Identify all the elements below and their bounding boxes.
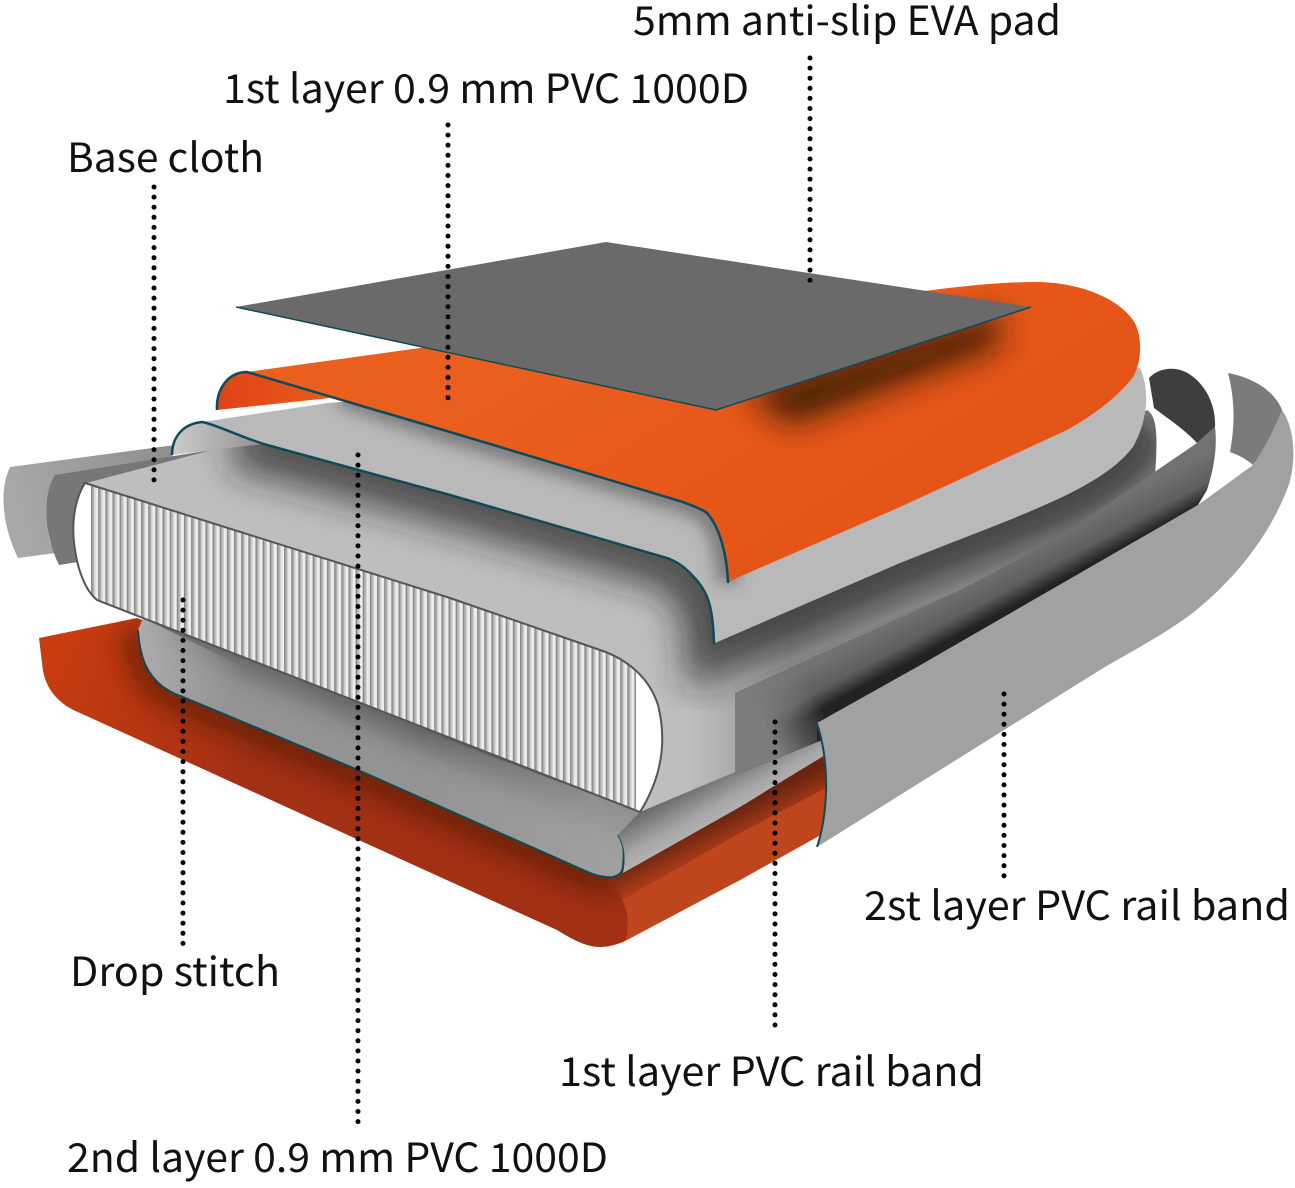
bottom orange: light rounded edge [622, 787, 828, 941]
label: base cloth: Base cloth [67, 126, 264, 184]
leader: first layer PVC [446, 125, 450, 398]
leader: drop stitch [180, 600, 186, 946]
first PVC layer back flap [217, 372, 330, 410]
leader: second rail band [1002, 694, 1006, 878]
shadow under EVA pad [745, 312, 1000, 425]
second layer: underside sheet [138, 618, 830, 877]
first layer rail band [735, 427, 1216, 775]
leader: second layer PVC [356, 455, 360, 1124]
bottom orange layer [39, 618, 828, 947]
second layer: front lip [618, 736, 830, 873]
label: first rail band: 1st layer PVC rail band [559, 1040, 984, 1098]
underside sheet: right highlight [420, 730, 640, 877]
first layer teal fold edge [217, 372, 728, 583]
second PVC layer back flap [172, 422, 262, 455]
second PVC layer sheet [172, 350, 1146, 644]
bottom orange: dark strip under fold [615, 757, 828, 900]
shadow under second layer [235, 420, 1150, 643]
leader: base cloth [152, 187, 156, 490]
leader: EVA pad [808, 58, 812, 284]
rail band back: outer left piece [3, 445, 175, 558]
5mm EVA pad [236, 242, 1031, 410]
rail band back: outer right arc [1228, 373, 1285, 465]
drop stitch core [73, 480, 662, 815]
core body, base cloth and board side wall [86, 410, 1156, 812]
second layer teal fold edge [172, 422, 714, 644]
rail band back: inner left piece [46, 443, 260, 565]
rail band cut edge [817, 723, 826, 847]
label: second rail band: 2st layer PVC rail band [864, 874, 1290, 932]
rail band: lighter end section [735, 627, 900, 775]
label: second layer PVC: 2nd layer 0.9 mm PVC 1000D [67, 1126, 608, 1184]
underside sheet: left highlight [138, 618, 270, 730]
second layer rail band [817, 410, 1293, 847]
label: first layer PVC: 1st layer 0.9 mm PVC 1000D [223, 57, 749, 115]
leader: first rail band [772, 722, 778, 1026]
shadow under first layer [340, 395, 728, 583]
dotted leader lines [154, 58, 1004, 1124]
label: drop stitch: Drop stitch [70, 940, 280, 998]
underside sheet: teal edge [138, 630, 624, 877]
first PVC layer orange sheet [217, 282, 1140, 583]
rail band back: inner right arc [1149, 369, 1215, 443]
